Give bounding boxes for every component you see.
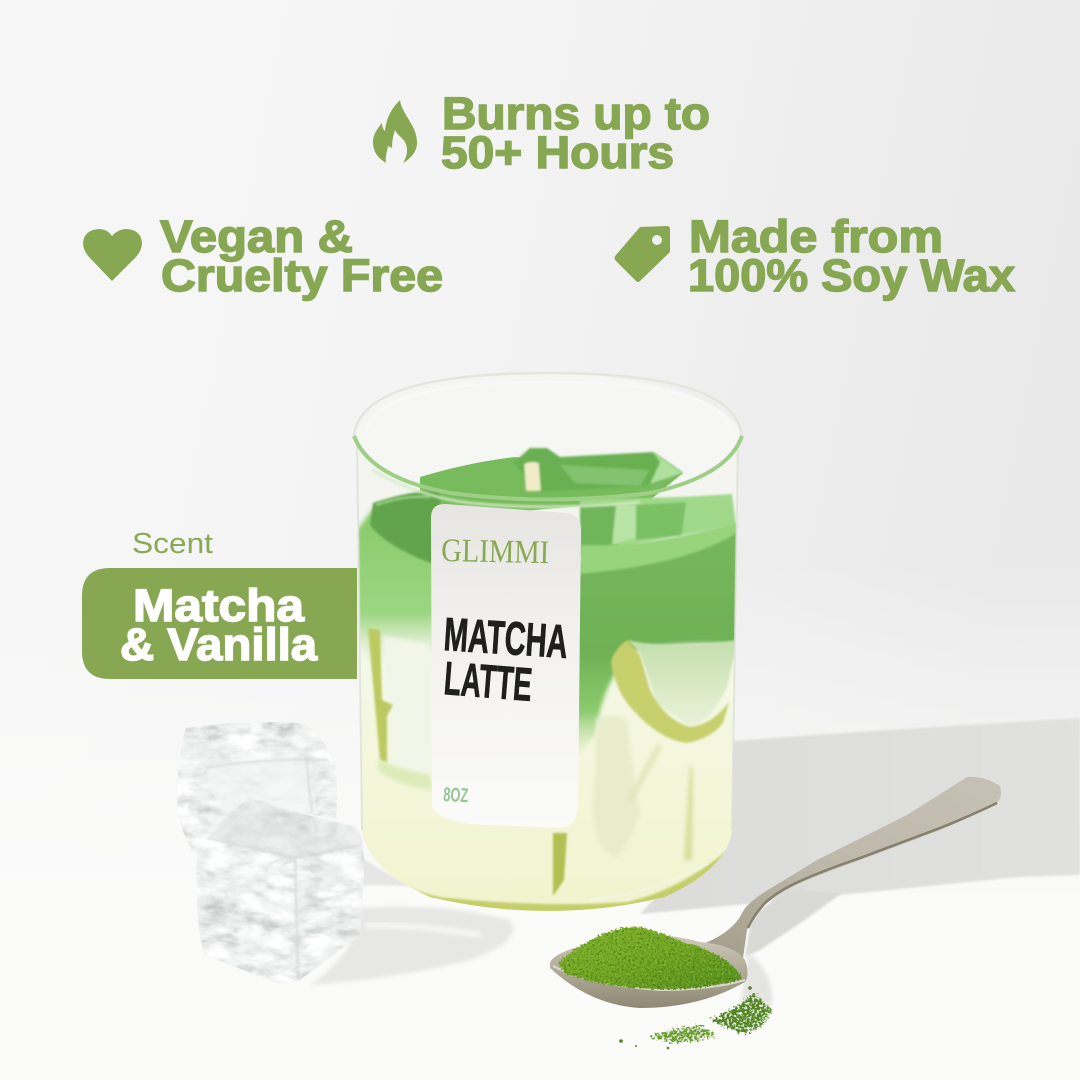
- product name: MATCHA: [442, 607, 570, 668]
- feature: burns up to 50+ hours: 50+ Hours: [441, 127, 674, 178]
- ice pieces in wax left: [368, 628, 432, 790]
- feature: vegan and cruelty free: [83, 211, 443, 301]
- melted ice on top: [513, 448, 683, 492]
- feature: made from soy wax: [614, 211, 1015, 301]
- ice cube front: [197, 798, 364, 984]
- glass walls: [357, 440, 738, 900]
- product name: [442, 607, 570, 711]
- matcha mound: [558, 927, 742, 989]
- lighter wax band: [580, 522, 738, 574]
- size: 8OZ: [443, 784, 469, 807]
- ice pieces in wax right: [553, 640, 738, 896]
- heading text: Made from: [689, 211, 943, 262]
- scent pill: [82, 568, 357, 679]
- ice cube back: [177, 722, 337, 860]
- scent pill: & Vanilla: [120, 619, 318, 670]
- scent label: Scent: [132, 528, 213, 560]
- brand name: GLIMMI: [441, 533, 550, 571]
- scent pill: Matcha: [133, 580, 305, 631]
- green layer right: [575, 525, 738, 760]
- icon: price tag: [614, 226, 670, 282]
- icon: flame: [373, 100, 417, 163]
- wick: [524, 462, 541, 491]
- product name: LATTE: [442, 651, 534, 711]
- icon: heart: [83, 229, 142, 281]
- candle jar: [354, 373, 742, 930]
- spoon bowl: [550, 935, 748, 1008]
- heading text: Vegan &: [160, 211, 353, 262]
- feature: vegan and cruelty free: Cruelty Free: [161, 250, 443, 301]
- wax back surface: [420, 457, 683, 510]
- spoon: [550, 777, 1001, 1008]
- ice pieces right of label: [580, 494, 736, 555]
- spilled matcha powder: [619, 986, 772, 1049]
- heading text: Burns up to: [442, 88, 710, 139]
- dark wax front-left: [370, 491, 440, 565]
- jar base: [406, 850, 726, 911]
- spoon handle: [700, 777, 1001, 958]
- label: [431, 504, 581, 828]
- wax body: [357, 448, 740, 930]
- green layer left: [358, 508, 432, 656]
- shadow under ice and jar: [310, 858, 513, 985]
- feature: made from soy wax: 100% Soy Wax: [688, 250, 1015, 301]
- cast shadow of jar: [640, 718, 1080, 1008]
- jar rim: [354, 373, 742, 507]
- jar glass back: [356, 374, 740, 911]
- feature: burns up to 50+ hours: [373, 88, 710, 178]
